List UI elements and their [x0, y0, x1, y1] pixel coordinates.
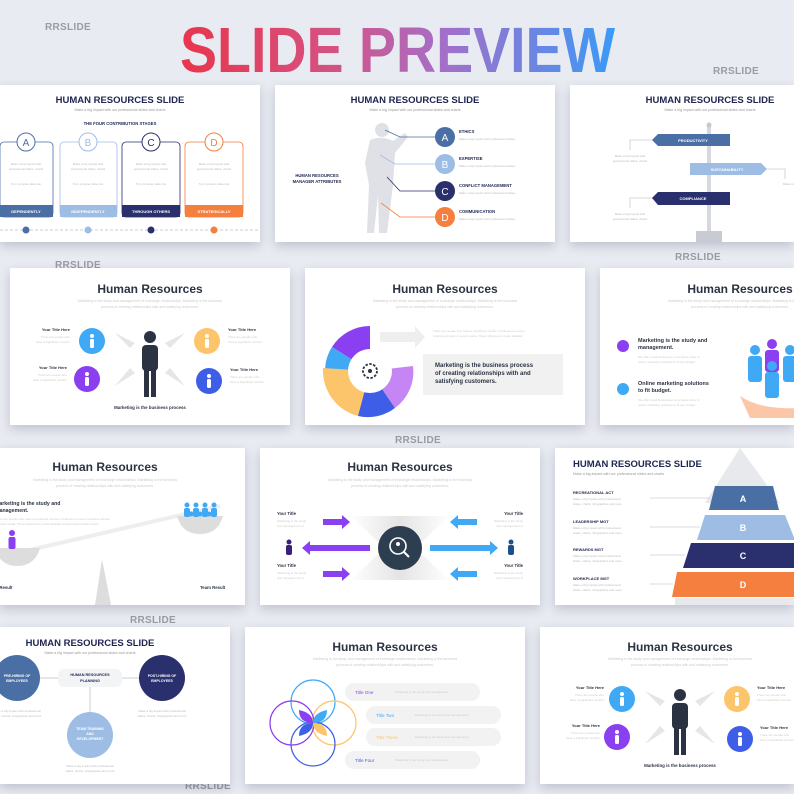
slide: signpost: professional slides, charts — [613, 159, 648, 163]
slide: manager attributes: HUMAN RESOURCES SLIDE — [351, 95, 479, 106]
slide: human resources people: There are people who — [230, 375, 260, 379]
slide: human resources people: have a significant number — [228, 340, 262, 344]
slide: venn petals: Title One — [355, 690, 374, 695]
slide: four contribution stages: Make a big impact with our professional slides and charts — [74, 108, 166, 112]
slide: four contribution stages: professional slides, charts — [197, 167, 232, 171]
slide: human resources people: There are people who — [228, 335, 258, 339]
slide: four contribution stages: THE FOUR CONTRIBUTION STAGES — [84, 121, 157, 126]
slide: human resources people: Human Resources — [97, 282, 203, 296]
slide: human resources people 2 — [540, 627, 794, 784]
slide: donut chart: Human Resources — [392, 282, 498, 296]
slide: donut chart — [305, 268, 585, 425]
slide: pyramid: REWARDS MGT — [573, 547, 604, 552]
slide: HR planning: EMPLOYEES — [151, 679, 174, 683]
watermark: RRSLIDE — [55, 260, 101, 271]
slide: four contribution stages: Turn complex data into — [199, 182, 230, 186]
watermark: RRSLIDE — [675, 252, 721, 263]
slide: seesaw: Team Result — [200, 585, 226, 590]
slide: search arrows: Marketing is the study — [494, 571, 523, 575]
slide: human resources people 2: have a significant number — [757, 698, 791, 702]
slide: signpost: Make a big impact with our professional slides and charts — [664, 108, 756, 112]
slide: pyramid: C — [740, 551, 747, 561]
slide: human resources people 2: Your Title Here — [572, 723, 601, 728]
slide: signpost: Make a big impact with — [615, 154, 646, 158]
slide: HR planning: slides, charts, infographics and more — [66, 769, 115, 773]
slide: human resources people: have a significant number — [33, 378, 67, 382]
slide: manager attributes: HUMAN RESOURCES — [295, 173, 339, 178]
slide: pyramid: slides, charts, infographics and more — [573, 559, 622, 563]
slide: donut chart: business domain or social media. These influencers create detailed — [433, 334, 523, 338]
slide: marketing study: process of creating relationships with and satisfying customers. — [691, 305, 789, 309]
slide: venn petals: Title Two — [376, 713, 395, 718]
watermark: RRSLIDE — [45, 22, 91, 33]
slide: signpost: SUSTAINABILITY — [711, 167, 744, 172]
slide: HR planning: slides, charts, infographics and more — [138, 714, 187, 718]
slide: pyramid: D — [740, 580, 747, 590]
slide: venn petals: Marketing is the study and management — [395, 690, 449, 694]
slide: HR planning: AND — [86, 732, 94, 736]
slide: human resources people 2: Your Title Here — [760, 725, 789, 730]
slide: human resources people: Marketing is the study and management of exchange relationships. Marketing is the business — [78, 299, 222, 303]
slide: search arrows: and management of — [496, 524, 523, 528]
slide: venn petals: Title Three — [376, 735, 398, 740]
slide: human resources people — [10, 268, 290, 425]
slide: seesaw: Human Resources — [52, 460, 158, 474]
slide: HR planning: PRE-HIRING OF — [4, 674, 31, 678]
slide: pyramid: HUMAN RESOURCES SLIDE — [573, 459, 702, 470]
slide: human resources people: process of creating relationships with and satisfying customers. — [101, 305, 199, 309]
slide: seesaw — [0, 448, 245, 605]
slide: pyramid: slides, charts, infographics and more — [573, 588, 622, 592]
slide: human resources people: Your Title Here — [228, 327, 257, 332]
slide: HR planning — [0, 627, 230, 784]
slide: manager attributes: EXPERTISE — [459, 156, 483, 161]
slide: human resources people 2: Marketing is the business process — [644, 763, 716, 768]
slide: search arrows: Your Title — [277, 563, 297, 568]
slide: manager attributes: C — [441, 187, 449, 198]
slide: human resources people 2: There are people who — [571, 731, 600, 735]
slide: manager attributes: ETHICS — [459, 129, 475, 134]
slide: search arrows: Marketing is the study — [277, 571, 307, 575]
slide: human resources people 2: have a significant number — [570, 698, 604, 702]
slide: search arrows: and management of — [496, 576, 523, 580]
slide: HR planning: Make a big impact with our professional slides and charts — [44, 651, 136, 655]
slide: pyramid: Make a big impact with professional — [573, 497, 621, 501]
watermark: RRSLIDE — [713, 66, 759, 77]
slide: seesaw: Marketing is the study and management of exchange relationships. Marketing is the business — [33, 478, 177, 482]
slide: search arrows — [260, 448, 540, 605]
slide: donut chart: process of creating relationships with and satisfying customers. — [396, 305, 494, 309]
slide: pyramid: Make a big impact with our professional slides and charts — [573, 472, 664, 476]
slide: manager attributes: MANAGER ATTRIBUTES — [293, 179, 342, 184]
slide: venn petals: Human Resources — [332, 640, 438, 654]
slide: human resources people 2: Human Resources — [627, 640, 733, 654]
slide: four contribution stages: INDEPENDENTLY — [71, 209, 105, 214]
slide: four contribution stages: D — [210, 138, 218, 149]
slide: human resources people: Marketing is the business process — [114, 405, 186, 410]
slide: four contribution stages: Make a big impact with — [199, 162, 230, 166]
slide: marketing study: online marketing solutions to fit any budget. — [638, 403, 696, 407]
slide: manager attributes: A — [442, 133, 449, 144]
slide: search arrows: and management of — [277, 576, 304, 580]
watermark: RRSLIDE — [185, 781, 231, 792]
slide: search arrows: Marketing is the study and management of exchange relationships. Marketing is the business — [328, 478, 472, 482]
slide: search arrows: Marketing is the study — [494, 519, 523, 523]
slide: pyramid: slides, charts, infographics and more — [573, 502, 622, 506]
slide: pyramid: WORKPLACE MGT — [573, 576, 610, 581]
slide: pyramid: Make a big impact with professional — [573, 583, 621, 587]
slide: marketing study: Human Resources — [687, 282, 793, 296]
slide: pyramid: B — [740, 523, 747, 533]
slide: HR planning: HUMAN RESOURCES — [70, 673, 110, 677]
slide: four contribution stages: Make a big impact with — [11, 162, 42, 166]
slide: signpost — [570, 85, 794, 242]
slide: marketing study: Marketing is the study and — [638, 338, 707, 344]
slide: human resources people 2: have a significant number — [566, 736, 600, 740]
slide: venn petals: Marketing is the study and management — [415, 713, 469, 717]
slide: human resources people: Your Title Here — [230, 367, 259, 372]
slide: HR planning: TEAM TRAINING — [76, 727, 104, 731]
slide: marketing study: We offer small businesses a complete array of — [638, 398, 700, 402]
slide: manager attributes: Make a big impact with professional slides, — [459, 137, 516, 141]
slide: marketing study: Online marketing solutions — [638, 381, 709, 387]
slide: HR planning: POST-HIRING OF — [148, 674, 177, 678]
slide: HR planning: PLANNING — [80, 679, 100, 683]
slide: four contribution stages: Make a big impact with — [73, 162, 104, 166]
slide: HR planning: EMPLOYEES — [6, 679, 29, 683]
slide: pyramid: slides, charts, infographics and more — [573, 531, 622, 535]
silhouette figure — [365, 123, 408, 233]
slide: human resources people 2: There are people who — [760, 733, 790, 737]
slide: four contribution stages: professional slides, charts — [134, 167, 169, 171]
slide: marketing study: to fit budget. — [638, 388, 672, 394]
slide: human resources people: There are people who — [41, 335, 70, 339]
slide: four contribution stages: Make a big impact with — [136, 162, 167, 166]
slide: search arrows: process of creating relationships with and satisfying customers. — [351, 484, 449, 488]
slide: four contribution stages: DEPENDENTLY — [11, 209, 41, 214]
slide: venn petals: Title Four — [355, 758, 375, 763]
slide: venn petals: Marketing is the study and management — [395, 758, 449, 762]
slide: four contribution stages: Turn complex data into — [73, 182, 104, 186]
slide: marketing study: management. — [638, 345, 674, 351]
watermark: RRSLIDE — [130, 615, 176, 626]
slide: human resources people: Your Title Here — [39, 365, 68, 370]
watermark: RRSLIDE — [395, 435, 441, 446]
slide: marketing study — [600, 268, 794, 425]
slide: donut chart: of creating relationships with and — [435, 371, 531, 377]
slide: manager attributes: Make a big impact with professional slides, — [459, 191, 516, 195]
slide: venn petals: Marketing is the study and management of exchange relationships. Marketing is the business — [313, 657, 457, 661]
slide: marketing study: online marketing solutions to fit any budget. — [638, 360, 696, 364]
slide: four contribution stages: STRATEGICALLY — [198, 209, 231, 214]
slide: human resources people 2: Marketing is the study and management of exchange relationships. Marketing is the business — [608, 657, 752, 661]
slide: pyramid: Make a big impact with professional — [573, 526, 621, 530]
slide: four contribution stages: Turn complex data into — [11, 182, 42, 186]
slide: four contribution stages: C — [147, 138, 155, 149]
slide: HR planning: Make a big impact with professional — [66, 764, 114, 768]
slide: pyramid: Make a big impact with professional — [573, 554, 621, 558]
slide: human resources people 2: Your Title Here — [757, 685, 786, 690]
slide: pyramid: RECREATIONAL ACT — [573, 490, 614, 495]
slide: venn petals — [245, 627, 525, 784]
slide: manager attributes: CONFLICT MANAGEMENT — [459, 183, 512, 188]
slide: four contribution stages — [0, 85, 260, 242]
slide: four contribution stages: HUMAN RESOURCES SLIDE — [56, 95, 184, 106]
slide: pyramid — [555, 448, 794, 605]
slide: human resources people: Your Title Here — [42, 327, 71, 332]
slide: donut chart: There are people who have a significant number of followers in every — [433, 329, 525, 333]
slide: human resources people: have a significant number — [230, 380, 264, 384]
slide: four contribution stages: professional slides, charts — [9, 167, 44, 171]
slide: seesaw: process of creating relationships with and satisfying customers. — [56, 484, 154, 488]
slide: human resources people 2: have a significant number — [760, 738, 794, 742]
slide: pyramid: A — [740, 494, 747, 504]
slide: venn petals: Marketing is the study and management — [415, 735, 469, 739]
slide: venn petals: process of creating relationships with and satisfying customers. — [336, 663, 434, 667]
slide: four contribution stages: professional slides, charts — [71, 167, 106, 171]
slide: signpost: COMPLIANCE — [680, 196, 707, 201]
slide: manager attributes: B — [442, 160, 449, 171]
slide: four contribution stages: THROUGH OTHERS — [132, 209, 170, 214]
slide: donut chart: satisfying customers. — [435, 379, 497, 385]
slide: signpost: Make a big impact with — [615, 212, 646, 216]
slide: signpost: HUMAN RESOURCES SLIDE — [646, 95, 774, 106]
slide: marketing study: We offer small businesses a complete array of — [638, 355, 700, 359]
slide: manager attributes: D — [441, 213, 449, 224]
slide: human resources people 2: There are people who — [757, 693, 787, 697]
slide: manager attributes: Make a big impact with professional slides, — [459, 164, 516, 168]
slide: four contribution stages: Turn complex data into — [136, 182, 167, 186]
slide: HR planning: HUMAN RESOURCES SLIDE — [26, 638, 154, 649]
slide: search arrows: Your Title — [277, 511, 297, 516]
slide: pyramid: LEADERSHIP MGT — [573, 519, 609, 524]
slide: human resources people: have a significant number — [36, 340, 70, 344]
slide: four contribution stages: B — [85, 138, 92, 149]
slide: donut chart: Marketing is the study and management of exchange relationships. Marketing is the business — [373, 299, 517, 303]
slide: manager attributes: Make a big impact with our professional slides and charts — [369, 108, 461, 112]
slide: human resources people 2: process of creating relationships with and satisfying customers. — [631, 663, 729, 667]
slide: search arrows: Human Resources — [347, 460, 453, 474]
slide: manager attributes — [275, 85, 555, 242]
slide: search arrows: Your Title — [504, 511, 524, 516]
slide: signpost: PRODUCTIVITY — [678, 138, 708, 143]
slide: signpost: professional slides, charts — [613, 217, 648, 221]
slide: human resources people 2: Your Title Here — [576, 685, 605, 690]
slide: human resources people: There are people who — [38, 373, 67, 377]
slide: HR planning: DEVELOPMENT — [77, 737, 104, 741]
slide: manager attributes: COMMUNICATION — [459, 209, 495, 214]
slide: human resources people 2: There are people who — [575, 693, 604, 697]
slide: HR planning: Make a big impact with professional — [138, 709, 186, 713]
slide: four contribution stages: A — [23, 138, 30, 149]
slide: search arrows: Marketing is the study — [277, 519, 307, 523]
slide: manager attributes: Make a big impact with professional slides, — [459, 217, 516, 221]
slide: search arrows: and management of — [277, 524, 304, 528]
slide: donut chart: Marketing is the business process — [435, 363, 534, 369]
slide: search arrows: Your Title — [504, 563, 524, 568]
